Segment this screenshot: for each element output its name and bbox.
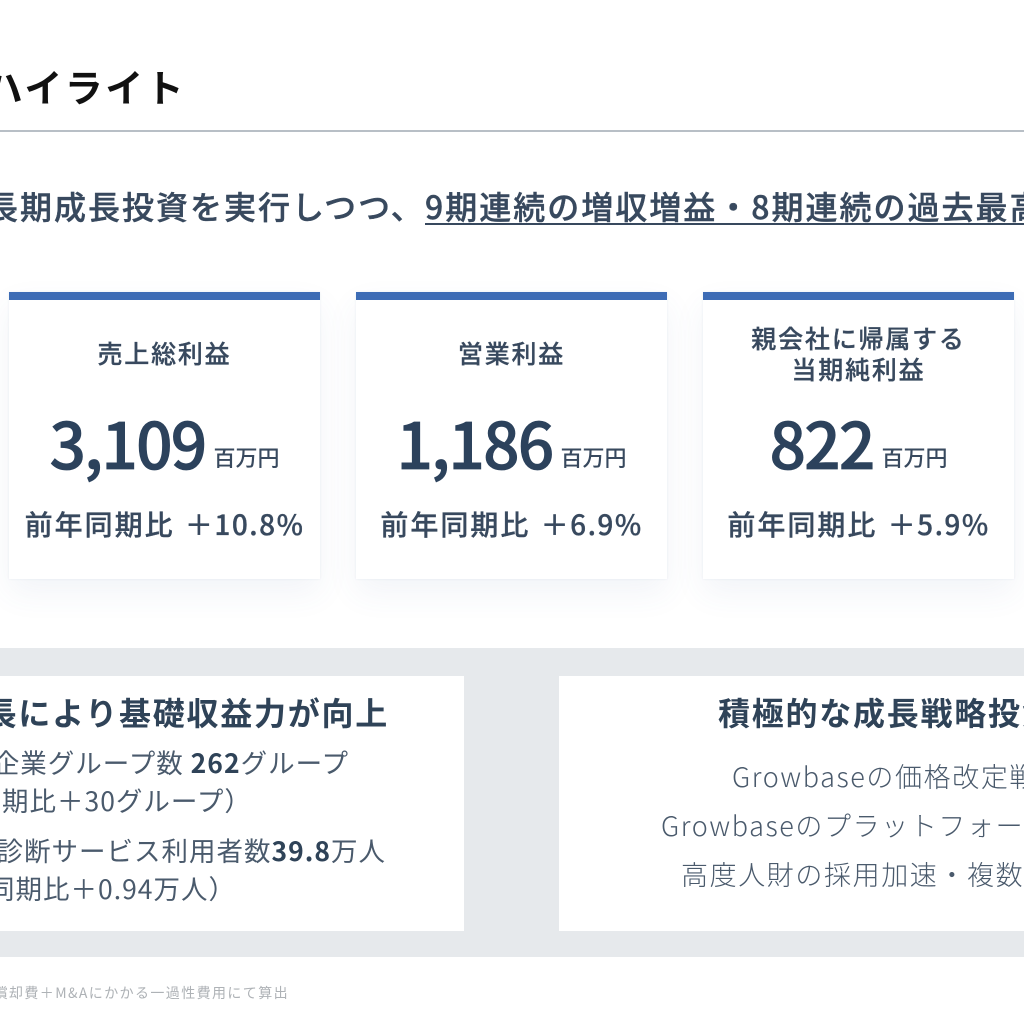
title rule: [0, 130, 1024, 132]
year on year: 前年同期比 ＋5.9%: [727, 504, 990, 544]
card label: 営業利益: [458, 335, 565, 371]
card label: [751, 320, 966, 387]
card value: 1,186 百万円: [396, 396, 626, 488]
metric: groups change: 期比＋30グループ）: [2, 780, 252, 819]
card value: 822 百万円: [769, 396, 948, 488]
card: gross profit: [9, 292, 320, 579]
card accent bar: [356, 292, 667, 300]
card accent bar: [703, 292, 1014, 300]
card label: 親会社に帰属する: [751, 320, 966, 356]
panel: growth investment: [559, 676, 1024, 931]
bottom band: [0, 648, 1024, 957]
card value: 3,109 百万円: [49, 396, 280, 488]
metric: enterprise groups: 企業グループ数 262グループ: [0, 742, 349, 781]
card: operating profit: [356, 292, 667, 579]
year on year: 前年同期比 ＋10.8%: [25, 504, 304, 544]
card accent bar: [9, 292, 320, 300]
card label: 当期純利益: [791, 351, 926, 387]
metric: service users: 診断サービス利用者数39.8万人: [0, 830, 386, 869]
card label: 売上総利益: [97, 335, 232, 371]
footnote: 償却費＋M&Aにかかる一過性費用にて算出: [0, 983, 289, 1003]
panel: base earnings: [0, 676, 464, 931]
year on year: 前年同期比 ＋6.9%: [380, 504, 643, 544]
subtitle: [0, 183, 1024, 229]
card: net profit: [703, 292, 1014, 579]
